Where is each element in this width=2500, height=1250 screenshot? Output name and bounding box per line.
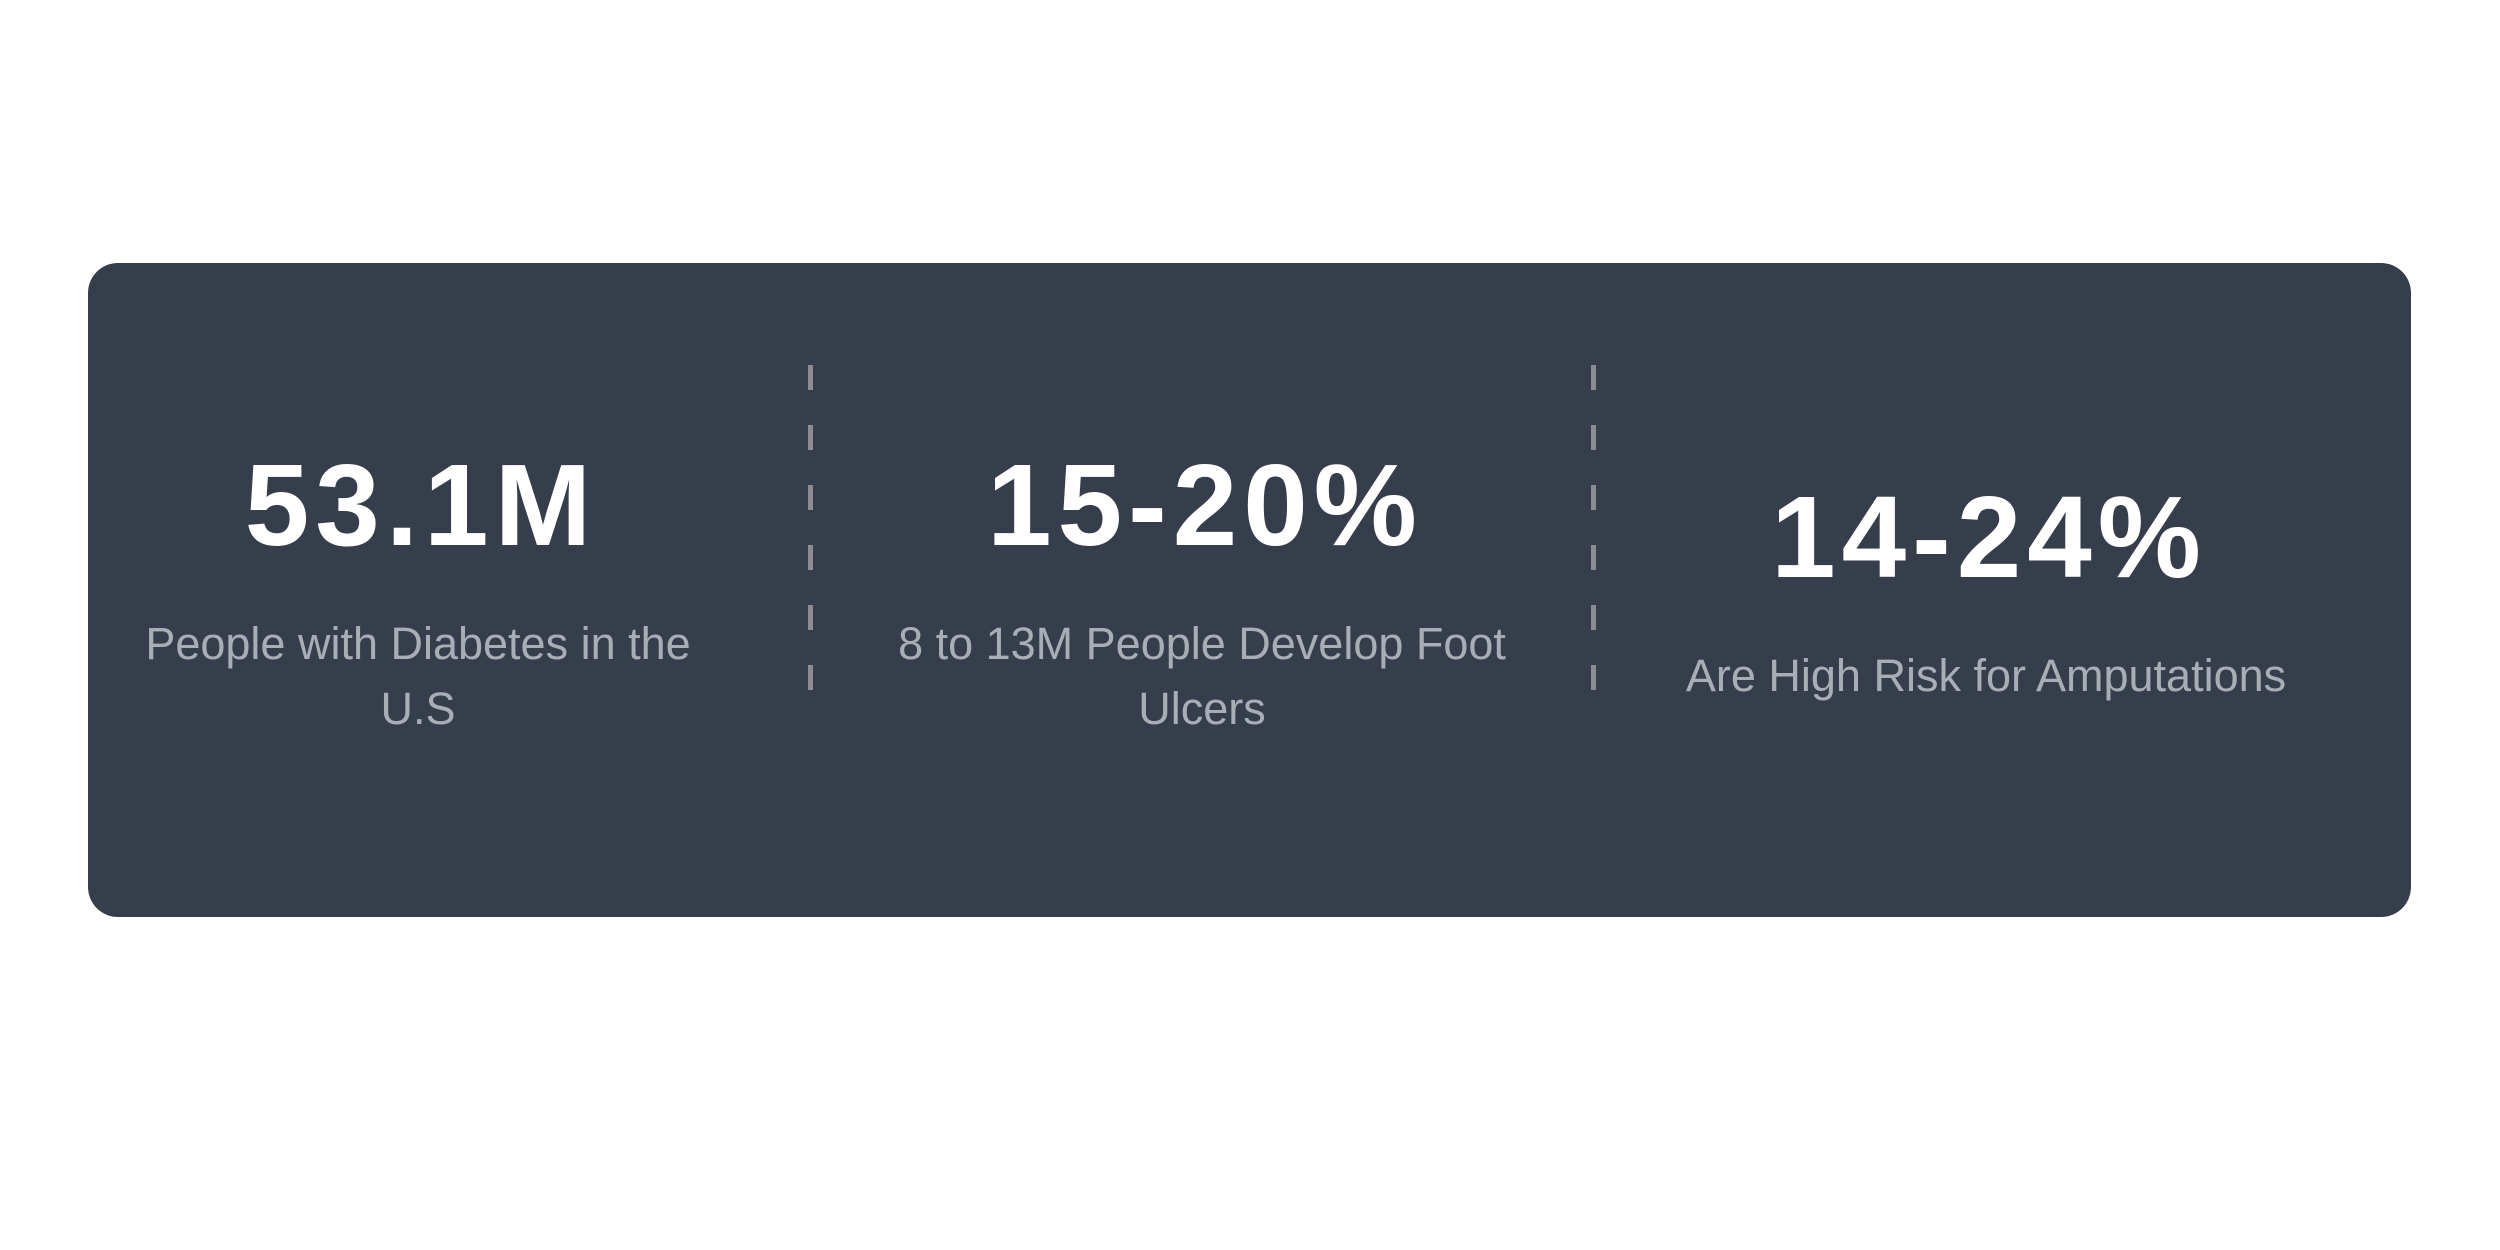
stat 3 number: 14-24%	[1771, 472, 2207, 602]
stat 1 label: People with Diabetes in the	[145, 618, 691, 669]
stat 3 label: Are High Risk for Amputations	[1686, 650, 2286, 701]
stat 2 number: 15-20%	[987, 440, 1423, 570]
stat 1 label	[145, 618, 691, 734]
stat 1 label: U.S	[380, 683, 456, 734]
stat 2 label: Ulcers	[1138, 683, 1266, 734]
panel: stats	[88, 263, 2411, 917]
stat 1 number: 53.1M	[245, 440, 597, 570]
stat 2 label	[898, 618, 1506, 734]
stat 2 label: 8 to 13M People Develop Foot	[898, 618, 1506, 669]
divider 1	[808, 343, 813, 695]
divider 2	[1591, 343, 1596, 695]
